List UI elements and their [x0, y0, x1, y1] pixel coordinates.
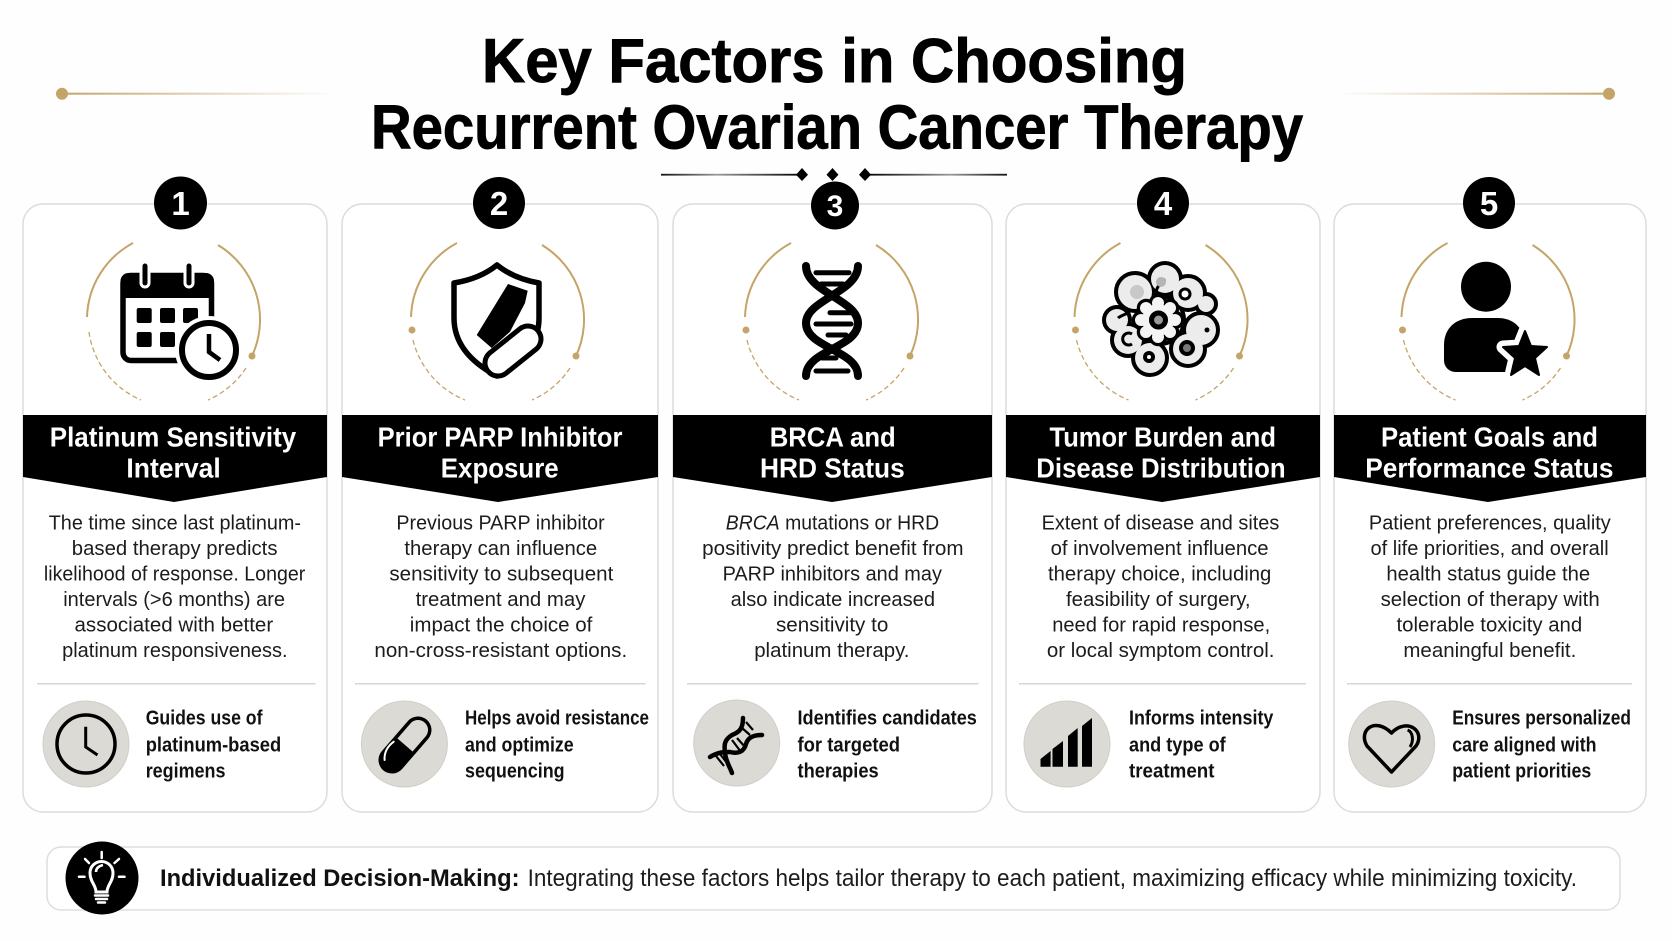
- description 1: likelihood of response. Longer: [44, 562, 305, 585]
- number badge 4: 4: [1154, 185, 1173, 222]
- description 3: sensitivity to: [776, 613, 888, 636]
- heading band 4: Disease Distribution: [1036, 452, 1286, 483]
- icon ring 1: [87, 243, 260, 400]
- icon ring 2: [408, 243, 584, 400]
- number badge 2: 2: [490, 185, 508, 222]
- heading band 5: Performance Status: [1365, 452, 1614, 483]
- callout text: Individualized Decision-Making:: [160, 865, 520, 892]
- number badge 4: [1137, 177, 1189, 229]
- icon ring 4: [1072, 243, 1248, 400]
- description 2: treatment and may: [416, 588, 586, 611]
- icon: heart badge: [1349, 701, 1435, 787]
- heading band 5: Patient Goals and: [1381, 422, 1598, 453]
- icon ring 3: [742, 243, 918, 400]
- description 2: therapy can influence: [404, 537, 597, 560]
- number badge 3: 3: [827, 190, 843, 223]
- benefit 2: [465, 706, 649, 783]
- icon: DNA helix: [806, 266, 858, 376]
- description 4: [1042, 511, 1279, 662]
- benefit 1: platinum-based: [146, 734, 281, 757]
- description 2: [374, 511, 627, 662]
- benefit 1: Guides use of: [146, 706, 263, 729]
- description 3: PARP inhibitors and may: [723, 562, 943, 585]
- benefit 4: [1129, 706, 1274, 783]
- title divider with diamonds: [661, 168, 1007, 181]
- icon: clock badge: [43, 701, 129, 787]
- description 4: Extent of disease and sites: [1042, 511, 1279, 534]
- description 5: [1369, 511, 1612, 662]
- description 5: of life priorities, and overall: [1370, 537, 1609, 560]
- callout text: Integrating these factors helps tailor therapy to each patient, maximizing efficacy while minimizing toxicity.: [528, 865, 1577, 892]
- icon: patient with star: [1444, 262, 1547, 375]
- description 4: of involvement influence: [1051, 537, 1269, 560]
- icon: calendar with clock: [120, 266, 243, 384]
- description 3: also indicate increased: [731, 588, 935, 611]
- benefit 5: patient priorities: [1452, 760, 1591, 783]
- title: Recurrent Ovarian Cancer Therapy: [371, 94, 1303, 162]
- number badge 1: 1: [171, 185, 190, 222]
- description 2: Previous PARP inhibitor: [396, 511, 605, 534]
- icon: light bulb: [66, 842, 138, 914]
- description 4: therapy choice, including: [1048, 562, 1271, 585]
- heading band 1: Interval: [126, 452, 221, 483]
- panel: patient goals and performance status: [1334, 177, 1646, 812]
- benefit 5: care aligned with: [1452, 734, 1596, 757]
- number badge 2: [473, 177, 525, 229]
- title: [371, 27, 1303, 162]
- panel: prior PARP inhibitor exposure: [342, 177, 658, 812]
- callout: individualized decision-making: [47, 842, 1620, 914]
- description 4: feasibility of surgery,: [1066, 588, 1251, 611]
- benefit 4: Informs intensity: [1129, 706, 1274, 729]
- title: Key Factors in Choosing: [482, 27, 1187, 96]
- description 2: sensitivity to subsequent: [389, 562, 614, 585]
- description 4: or local symptom control.: [1047, 639, 1274, 662]
- panel: BRCA and HRD status: [673, 182, 992, 812]
- heading band 2: [342, 415, 658, 502]
- heading band 4: Tumor Burden and: [1050, 422, 1276, 453]
- description 1: based therapy predicts: [72, 537, 278, 560]
- benefit 4: and type of: [1129, 734, 1226, 757]
- description 3: [702, 511, 964, 662]
- icon ring 5: [1399, 243, 1575, 400]
- number badge 1: [154, 176, 207, 230]
- benefit 3: Identifies candidates: [798, 706, 977, 729]
- benefit 5: Ensures personalized: [1452, 706, 1631, 729]
- description 3: positivity predict benefit from: [702, 537, 964, 560]
- benefit 2: Helps avoid resistance: [465, 706, 649, 729]
- heading band 4: [1006, 415, 1320, 502]
- benefit 5: [1452, 706, 1631, 783]
- benefit 4: treatment: [1129, 760, 1215, 783]
- description 5: selection of therapy with: [1381, 588, 1600, 611]
- icon: shield with pill: [454, 265, 539, 376]
- number badge 5: 5: [1480, 185, 1498, 222]
- description 1: platinum responsiveness.: [62, 639, 288, 662]
- description 2: non-cross-resistant options.: [374, 639, 627, 662]
- description 1: [44, 511, 305, 662]
- description 3: BRCA mutations or HRD: [726, 511, 939, 534]
- heading band 3: HRD Status: [760, 452, 905, 483]
- panel: tumor burden and disease distribution: [1006, 177, 1320, 812]
- description 5: Patient preferences, quality: [1369, 511, 1612, 534]
- panel: platinum sensitivity interval: [23, 176, 327, 812]
- benefit 1: regimens: [146, 760, 226, 783]
- heading band 3: BRCA and: [770, 422, 896, 453]
- description 5: meaningful benefit.: [1403, 639, 1576, 662]
- number badge 5: [1463, 177, 1515, 229]
- description 5: tolerable toxicity and: [1396, 613, 1582, 636]
- benefit 2: and optimize: [465, 734, 574, 757]
- heading band 1: Platinum Sensitivity: [50, 422, 297, 453]
- heading band 2: Prior PARP Inhibitor: [378, 422, 622, 453]
- description 2: impact the choice of: [410, 613, 593, 636]
- icon: rising bars badge: [1024, 701, 1110, 787]
- description 4: need for rapid response,: [1052, 613, 1270, 636]
- heading band 3: [673, 415, 992, 502]
- benefit 1: [146, 706, 281, 783]
- icon: tumor cell cluster: [1106, 265, 1216, 373]
- icon: small DNA badge: [694, 700, 780, 786]
- benefit 3: therapies: [798, 760, 879, 783]
- heading band 1: [23, 415, 327, 502]
- benefit 3: [798, 706, 977, 783]
- gold rule right: [1338, 88, 1615, 100]
- benefit 2: sequencing: [465, 760, 565, 783]
- description 5: health status guide the: [1386, 562, 1590, 585]
- number badge 3: [811, 182, 859, 230]
- description 1: The time since last platinum-: [49, 511, 301, 534]
- icon: capsule badge: [361, 701, 447, 787]
- description 3: platinum therapy.: [754, 639, 910, 662]
- heading band 2: Exposure: [441, 452, 559, 483]
- benefit 3: for targeted: [798, 734, 900, 757]
- description 1: associated with better: [74, 613, 273, 636]
- gold rule left: [56, 88, 334, 100]
- description 1: intervals (>6 months) are: [63, 588, 285, 611]
- heading band 5: [1334, 415, 1646, 502]
